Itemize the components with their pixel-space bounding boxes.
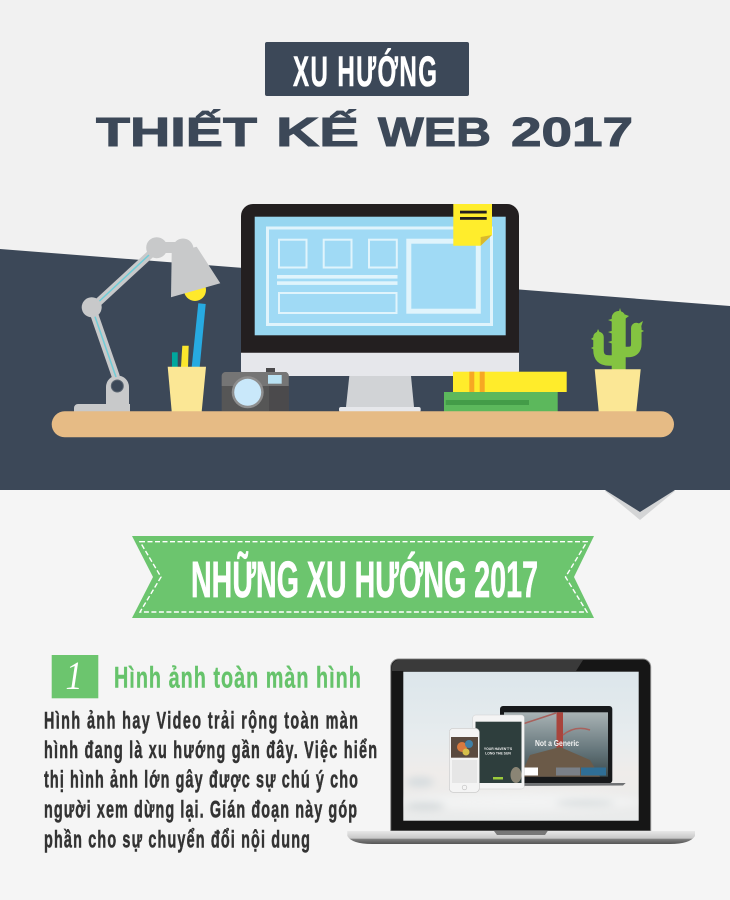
number badge 1: 1	[65, 655, 83, 699]
number badge 1	[52, 655, 98, 699]
screen	[255, 217, 506, 335]
monitor frame	[241, 204, 519, 353]
laptop screen	[403, 672, 639, 821]
title: THIẾT KẾ WEB 2017	[96, 109, 633, 155]
tablet caption: LONG THE SUN	[485, 752, 511, 756]
monitor stand	[339, 376, 421, 412]
tablet	[473, 715, 524, 789]
small laptop	[500, 706, 626, 786]
trend description: người xem dừng lại. Gián đoạn này góp	[44, 797, 357, 824]
section ribbon	[132, 536, 594, 618]
small laptop caption: Not a Generic	[535, 738, 579, 748]
trend description: phần cho sự chuyển đổi nội dung	[44, 827, 310, 853]
trend description	[44, 708, 377, 853]
camera	[222, 368, 289, 411]
phone	[449, 728, 479, 792]
tablet caption	[484, 747, 513, 756]
clouds	[400, 777, 640, 811]
trend description: Hình ảnh hay Video trải rộng toàn màn	[44, 708, 358, 734]
dark hero band	[0, 249, 730, 490]
laptop base	[347, 831, 695, 844]
pencil cup	[168, 303, 206, 412]
title: THIẾT KẾ WEB 2017: 2017	[511, 109, 633, 155]
desk lamp	[74, 237, 220, 412]
monitor chin	[241, 345, 519, 376]
title badge: XU HƯỚNG	[265, 42, 469, 96]
laptop lid	[391, 659, 651, 831]
trend description: thị hình ảnh lớn gây được sự chú ý cho	[44, 767, 358, 794]
title: THIẾT KẾ WEB 2017: THIẾT	[96, 109, 257, 155]
wireframe layout	[268, 228, 492, 324]
trend description: hình đang là xu hướng gần đây. Việc hiển	[44, 737, 377, 764]
stack of books	[444, 372, 567, 412]
title: THIẾT KẾ WEB 2017: KẾ	[276, 109, 359, 155]
laptop mockup	[347, 659, 695, 844]
trend heading: Hình ảnh toàn màn hình	[114, 662, 361, 695]
top background	[0, 0, 730, 300]
ribbon heading: NHỮNG XU HƯỚNG 2017	[191, 551, 538, 608]
sticky note	[453, 204, 492, 246]
cactus in pot	[591, 308, 644, 412]
title badge: XU HƯỚNG: XU HƯỚNG	[293, 47, 437, 96]
desk	[52, 411, 674, 437]
title: THIẾT KẾ WEB 2017: WEB	[378, 109, 491, 155]
arrow pointer under band	[605, 490, 675, 520]
tablet caption: YOUR HAVEN'T'S	[484, 747, 513, 751]
monitor	[241, 204, 519, 412]
